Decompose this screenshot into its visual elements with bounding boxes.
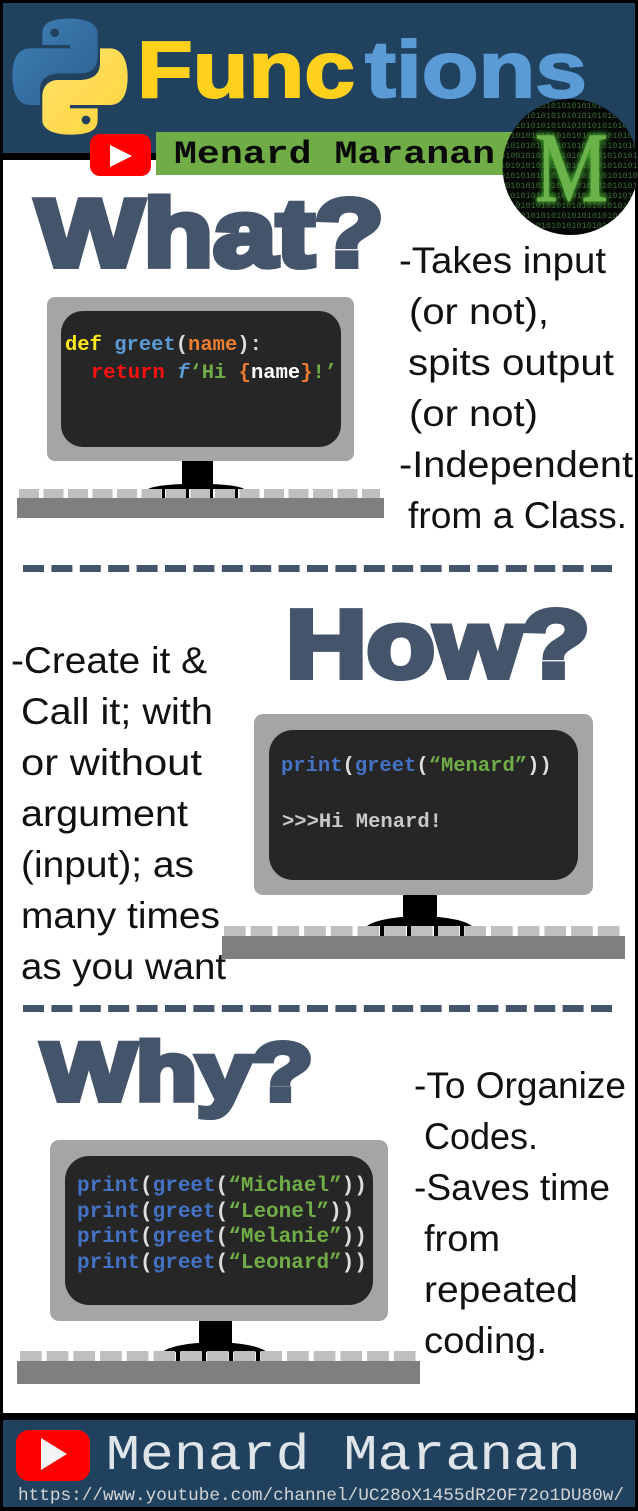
- code: return statement: return f‘Hi {name}!’: [91, 362, 337, 385]
- text block: how: or without: [21, 742, 203, 783]
- monitor: function call: [222, 714, 625, 959]
- text block: how: [11, 640, 227, 987]
- text block: how: argument: [21, 793, 189, 834]
- title: Func: [137, 25, 355, 114]
- icon: youtube play: [90, 134, 151, 176]
- text block: how: many times: [21, 895, 220, 936]
- icon: youtube play footer: [16, 1430, 90, 1481]
- code: print calls: print(greet(“Leonel”)): [77, 1201, 354, 1224]
- text block: how: as you want: [21, 946, 227, 987]
- text block: what: -Takes input: [399, 240, 607, 281]
- text block: what: [399, 240, 634, 536]
- icon: python logo: [12, 19, 128, 135]
- text block: what: (or not),: [409, 291, 549, 332]
- footer url: https://www.youtube.com/channel/UC28oX1455dR2OF72o1DU80w/: [18, 1486, 624, 1506]
- text block: why: from: [424, 1218, 500, 1259]
- icon: binary M logo: M: [535, 112, 608, 223]
- code: output: >>>Hi Menard!: [282, 811, 442, 834]
- heading: What?: What?: [36, 180, 384, 287]
- text block: why: repeated: [424, 1269, 578, 1310]
- monitor: function definition: [17, 297, 384, 518]
- text block: why: -Saves time: [414, 1167, 610, 1208]
- code: def greet: def greet(name):: [65, 334, 262, 357]
- text block: what: spits output: [408, 342, 615, 383]
- text block: how: (input); as: [21, 844, 194, 885]
- footer channel name: Menard Maranan: [106, 1428, 581, 1485]
- heading: Why?: Why?: [42, 1027, 313, 1118]
- text block: why: -To Organize: [414, 1065, 626, 1106]
- channel name bar: [156, 132, 516, 175]
- code: print call: print(greet(“Menard”)): [281, 755, 552, 778]
- monitor: repeated calls: [17, 1140, 420, 1384]
- text block: what: from a Class.: [408, 495, 627, 536]
- title: tions: [365, 25, 587, 114]
- text block: how: -Create it &: [11, 640, 207, 681]
- text block: why: coding.: [424, 1320, 547, 1361]
- footer banner: [3, 1420, 635, 1507]
- text block: what: (or not): [409, 393, 538, 434]
- code: print calls: [77, 1175, 367, 1275]
- code: print calls: print(greet(“Melanie”)): [77, 1226, 367, 1249]
- title: [137, 25, 587, 114]
- text block: why: Codes.: [424, 1116, 538, 1157]
- header banner: [3, 3, 635, 153]
- heading: How?: How?: [286, 591, 590, 698]
- icon: binary M logo: M: [535, 112, 608, 223]
- code: print calls: print(greet(“Leonard”)): [77, 1252, 367, 1275]
- text block: what: -Independent: [399, 444, 634, 485]
- text block: why: [414, 1065, 626, 1361]
- code: print calls: print(greet(“Michael”)): [77, 1175, 367, 1198]
- icon: binary M logo: [500, 99, 638, 235]
- text block: how: Call it; with: [21, 691, 213, 732]
- channel name bar: Menard Maranan: [174, 136, 495, 173]
